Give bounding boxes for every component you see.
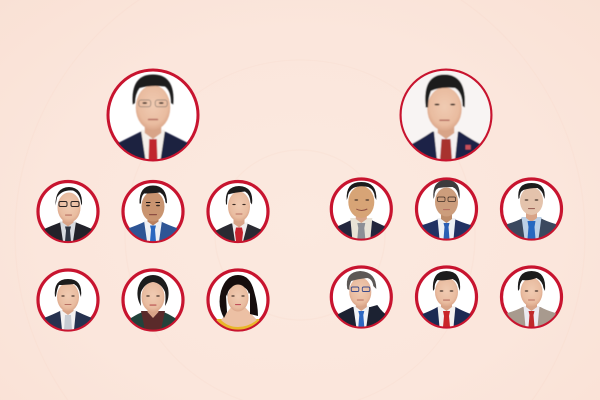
portrait: right row 1 column 3 bbox=[502, 179, 562, 239]
portrait: right row 2 column 3 bbox=[502, 267, 562, 327]
portrait: right row 1 column 2 bbox=[416, 179, 476, 239]
portrait: large right bbox=[401, 70, 491, 160]
portrait: left row 2 column 3 bbox=[208, 270, 268, 330]
portrait: right row 2 column 2 bbox=[416, 267, 476, 327]
portrait: left row 2 column 1 bbox=[38, 270, 98, 330]
portrait: left row 1 column 3 bbox=[208, 182, 268, 242]
portrait: right row 2 column 1 bbox=[331, 267, 391, 327]
portrait: right row 1 column 1 bbox=[331, 179, 391, 239]
portrait: left row 1 column 1 bbox=[38, 182, 98, 242]
portrait chart bbox=[36, 68, 564, 332]
portrait: left row 1 column 2 bbox=[123, 182, 183, 242]
portrait: left row 2 column 2 bbox=[123, 270, 183, 330]
portrait: large left bbox=[108, 70, 198, 160]
